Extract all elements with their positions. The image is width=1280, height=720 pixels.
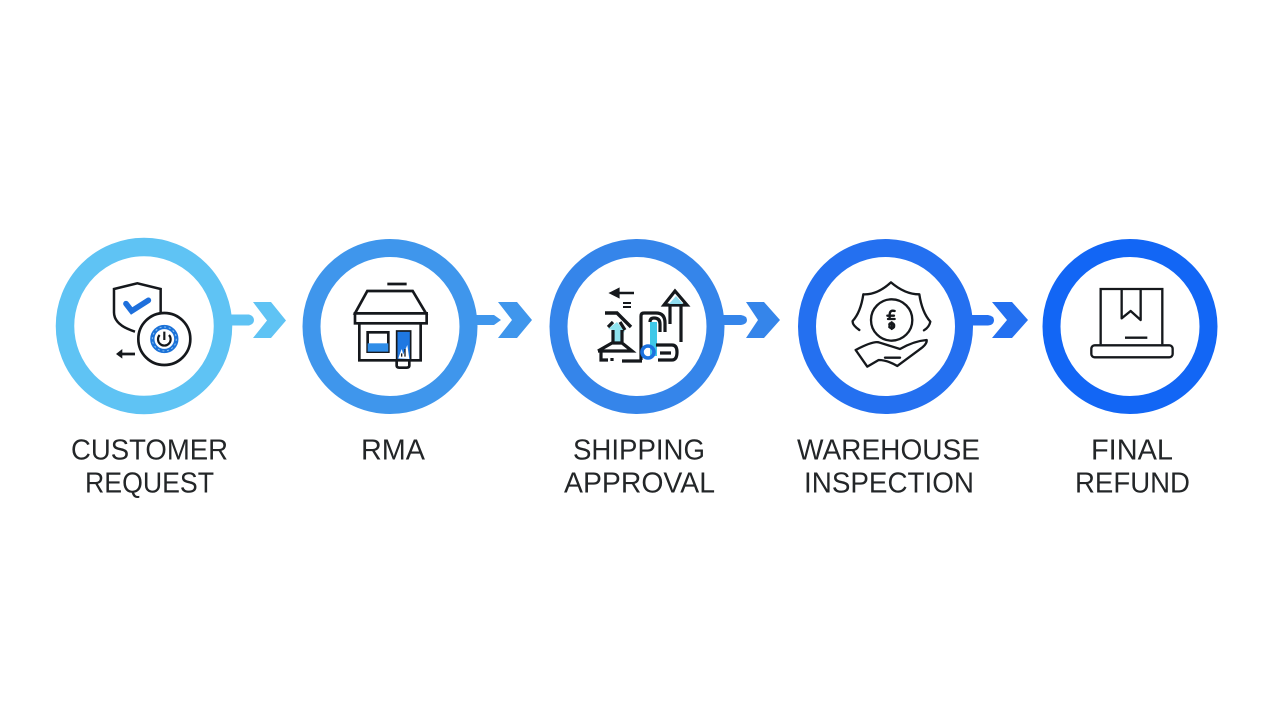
label: customer request: REQUEST <box>85 468 214 500</box>
ring: RMA <box>312 248 468 405</box>
arrow 4 <box>971 302 1028 338</box>
step 2: RMA <box>312 248 532 466</box>
label: shipping approval: APPROVAL <box>564 468 715 500</box>
ring: warehouse inspection <box>807 248 964 405</box>
arrow 1 <box>230 302 286 338</box>
label: shipping approval: SHIPPING <box>573 434 705 466</box>
label: warehouse inspection: INSPECTION <box>804 468 974 500</box>
icon: store <box>355 284 427 368</box>
label: final refund: FINAL <box>1091 434 1173 466</box>
arrow 3 <box>723 302 780 338</box>
icon: shipping arrows and parcels <box>598 290 687 361</box>
step 5: final refund <box>1052 248 1208 500</box>
icon: parcel on tray <box>1091 289 1173 357</box>
arrow 2 <box>476 302 532 338</box>
step 1: customer request <box>65 247 286 500</box>
label: final refund: REFUND <box>1075 468 1190 500</box>
ring: final refund <box>1052 248 1208 405</box>
label: warehouse inspection: WAREHOUSE <box>797 434 980 466</box>
icon: hand holding coin <box>853 282 930 367</box>
label: warehouse inspection <box>797 434 980 500</box>
icon: shield with check and power dial <box>114 283 190 365</box>
step 3: shipping approval <box>558 248 780 500</box>
label: RMA: RMA <box>361 434 426 466</box>
ring: customer request <box>65 247 223 405</box>
label: final refund <box>1075 434 1190 500</box>
ring: shipping approval <box>558 248 716 405</box>
label: customer request <box>71 434 228 500</box>
label: shipping approval <box>564 434 715 500</box>
step 4: warehouse inspection <box>797 248 1028 500</box>
label: customer request: CUSTOMER <box>71 434 228 466</box>
